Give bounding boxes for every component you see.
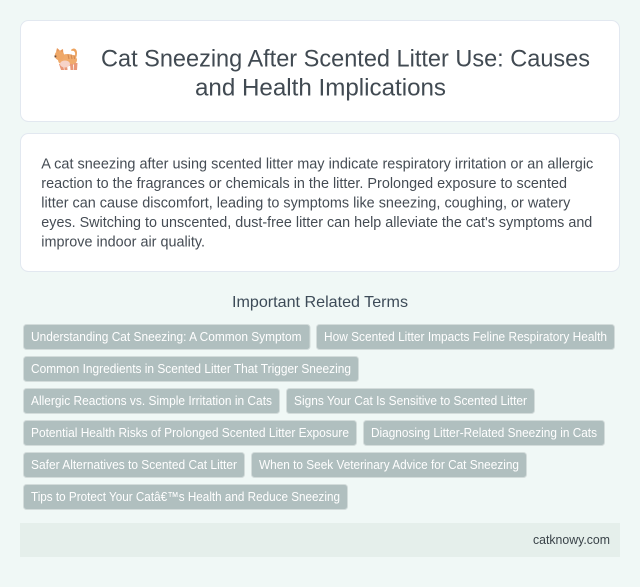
tag: diagnosing (364, 420, 604, 446)
heading: important related terms: Important Related Terms (232, 294, 408, 311)
icon: cat (54, 48, 78, 70)
tag: signs of sensitivity (286, 388, 534, 414)
tag: potential health risks: Potential Health Risks of Prolonged Scented Litter Exposure (31, 425, 349, 440)
tag: veterinary advice (252, 452, 526, 478)
tag: understanding cat sneezing: Understanding Cat Sneezing: A Common Symptom (31, 329, 302, 344)
title line 2: and Health Implications (195, 74, 446, 102)
tag: common ingredients (24, 356, 358, 382)
tag: common ingredients: Common Ingredients in Scented Litter That Trigger Sneezing (31, 361, 351, 376)
description text (41, 155, 594, 250)
panel: description card (20, 134, 620, 272)
tag: diagnosing: Diagnosing Litter-Related Sneezing in Cats (371, 425, 597, 440)
footer site name: catknowy.com (533, 532, 610, 547)
description text: eyes. Switching to unscented, dust-free litter can help alleviate the cat's symptoms and (41, 214, 592, 231)
tag: veterinary advice: When to Seek Veterinary Advice for Cat Sneezing (259, 457, 519, 472)
footer (20, 523, 620, 557)
tag: scented litter impacts: How Scented Litter Impacts Feline Respiratory Health (324, 329, 607, 344)
description text: improve indoor air quality. (41, 233, 205, 250)
tag: tips to protect (24, 484, 348, 510)
tag: safer alternatives (24, 452, 244, 478)
tag: potential health risks (24, 420, 356, 446)
title line 1: Cat Sneezing After Scented Litter Use: Causes (101, 46, 590, 72)
tag: safer alternatives: Safer Alternatives to Scented Cat Litter (31, 457, 238, 472)
panel: title card (20, 20, 620, 122)
tag: allergic reactions: Allergic Reactions vs. Simple Irritation in Cats (31, 393, 272, 408)
tag: scented litter impacts (316, 324, 614, 350)
tag: allergic reactions (24, 388, 280, 414)
tag: signs of sensitivity: Signs Your Cat Is Sensitive to Scented Litter (294, 393, 528, 408)
description text: litter can cause discomfort, leading to symptoms like sneezing, coughing, or watery (41, 194, 571, 211)
description text: reaction to the fragrances or chemicals in the litter. Prolonged exposure to scented (41, 175, 567, 192)
description text: A cat sneezing after using scented litter may indicate respiratory irritation or an allergic (41, 155, 594, 172)
tag: understanding cat sneezing (24, 324, 310, 350)
tag: tips to protect: Tips to Protect Your Catâ€™s Health and Reduce Sneezing (31, 489, 340, 504)
